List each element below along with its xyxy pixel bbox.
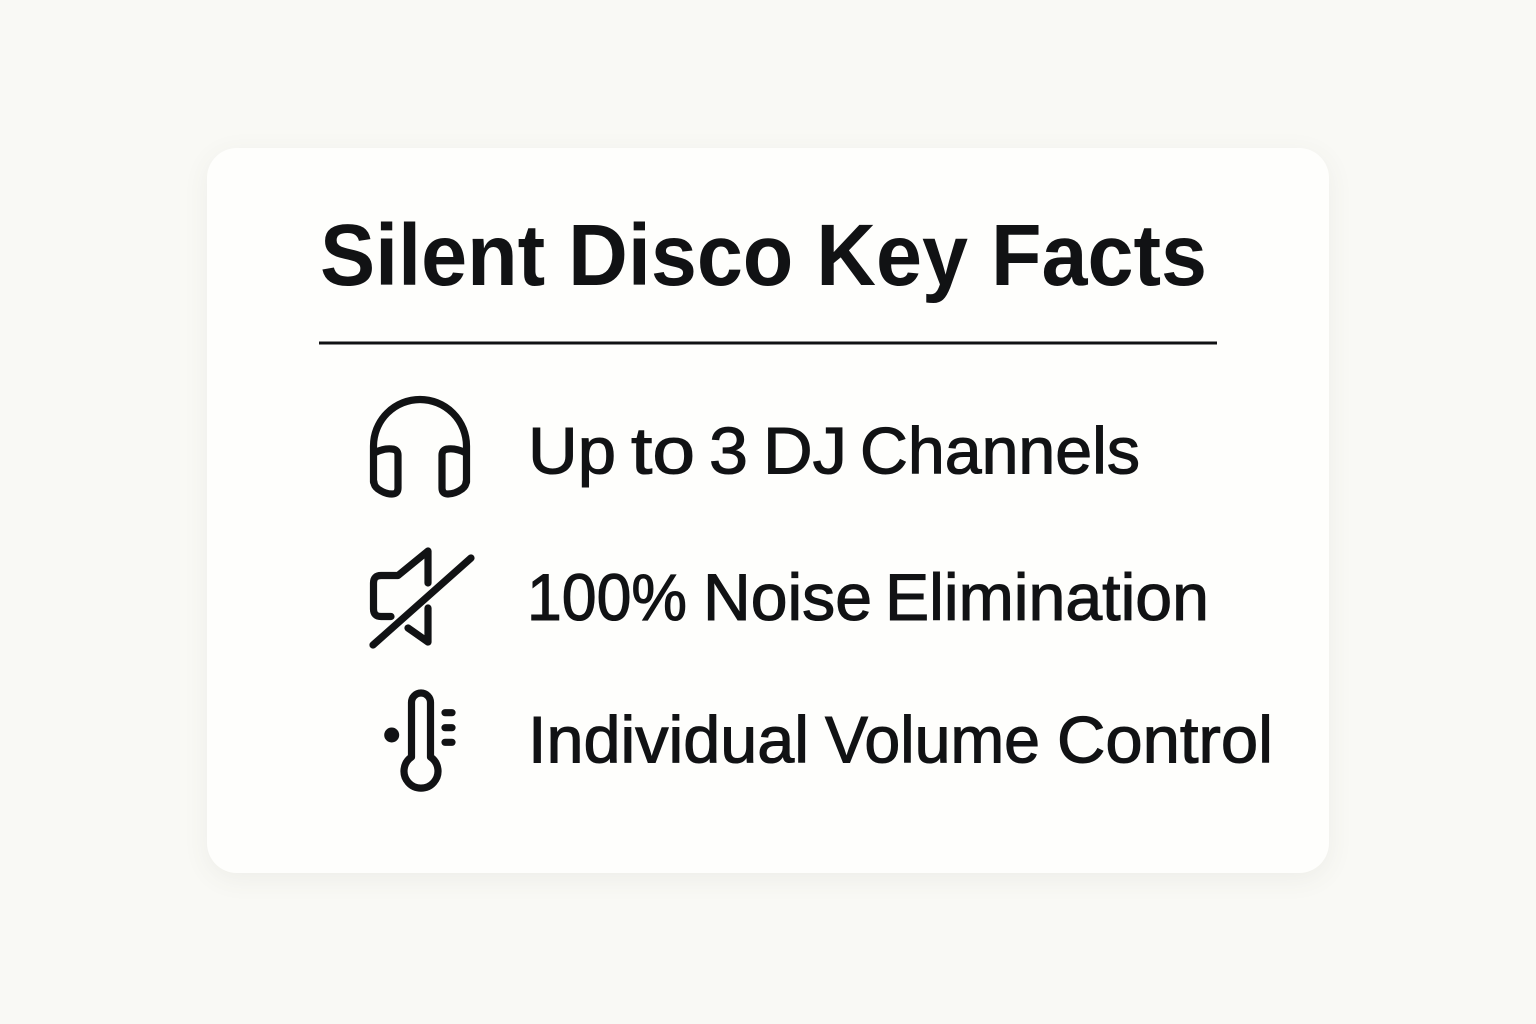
text: volume control: Volume xyxy=(825,702,1040,776)
text: DJ channels: Channels xyxy=(860,414,1140,488)
text: volume control: Individual xyxy=(528,702,809,776)
text: noise elimination: 100% xyxy=(527,560,687,634)
panel: key facts card xyxy=(207,148,1329,873)
text: DJ channels: 3 xyxy=(709,414,748,488)
text: DJ channels: DJ xyxy=(763,414,847,488)
text: noise elimination: Noise xyxy=(703,560,872,634)
text: noise elimination: Elimination xyxy=(885,560,1209,634)
text: DJ channels xyxy=(528,414,1140,488)
title: Silent Disco Key Facts xyxy=(320,207,1207,304)
text: DJ channels: Up xyxy=(528,414,616,488)
text: noise elimination xyxy=(527,560,1209,634)
text: volume control: Control xyxy=(1057,702,1273,776)
text: DJ channels: to xyxy=(631,414,695,488)
text: volume control xyxy=(528,702,1273,776)
icon: headphones xyxy=(374,400,466,494)
icon: thermometer xyxy=(384,693,452,788)
icon: muted speaker xyxy=(373,551,471,645)
